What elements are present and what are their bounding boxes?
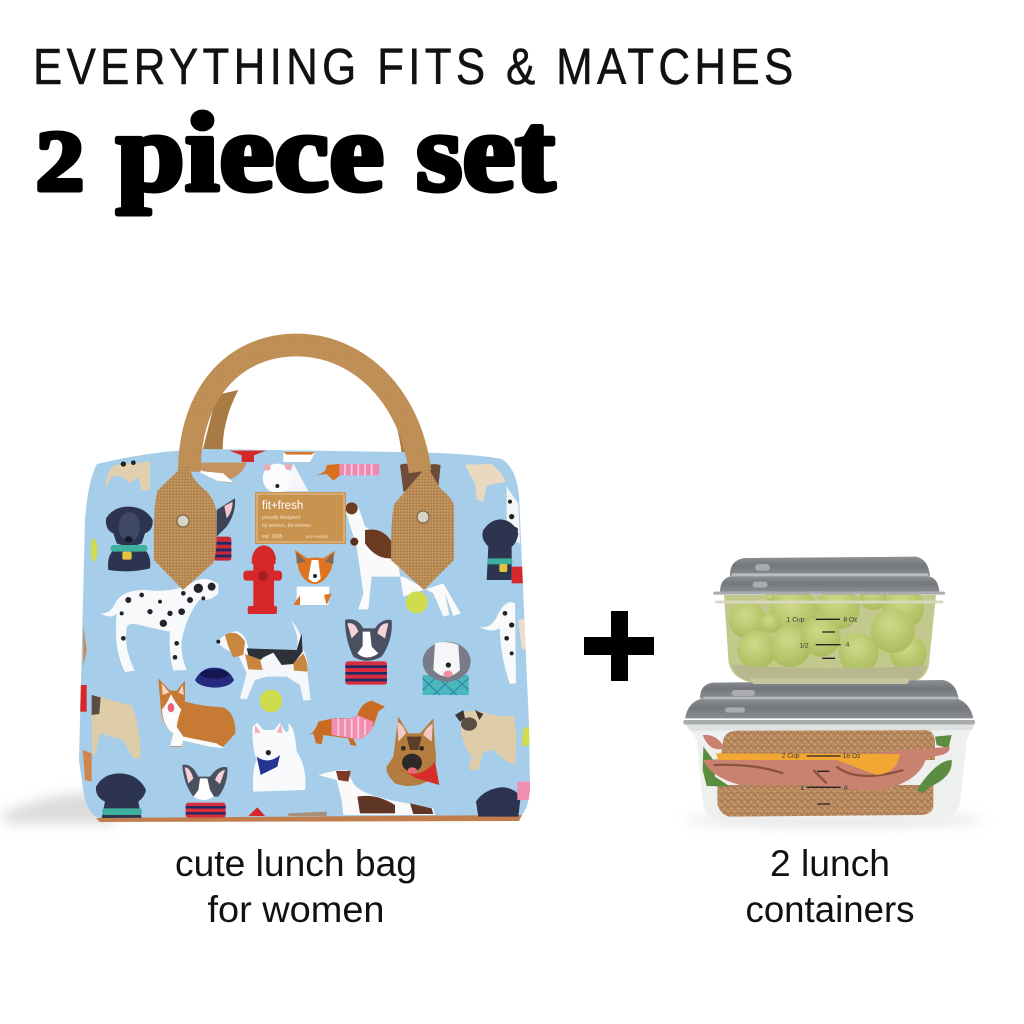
- back handle: [202, 390, 418, 454]
- lunch bag illustration: [0, 345, 532, 824]
- caption: lunch bag: for women: [208, 889, 384, 930]
- print: dalmatian at side: [479, 602, 528, 684]
- caption: lunch bag: [175, 843, 417, 930]
- small container body: [724, 595, 936, 684]
- headline: 2 piece set: 2: [36, 113, 84, 209]
- print: shih tzu: [423, 642, 471, 695]
- left rivet: [177, 515, 189, 527]
- print: corgi: [158, 678, 235, 748]
- small measurement marks: [787, 616, 857, 658]
- plus sign: [584, 611, 654, 681]
- left handle tab: [154, 466, 217, 590]
- caption: containers: 2 lunch: [770, 843, 890, 884]
- print: tennis ball: [406, 591, 428, 613]
- print: french bulldog under tab: [213, 498, 235, 561]
- small lid: [720, 576, 939, 592]
- print: tennis ball 2: [260, 690, 282, 712]
- print: top row dogs: [105, 451, 520, 543]
- print: fire hydrant: [243, 545, 282, 614]
- large measurement marks: 2 Cup: [782, 752, 800, 759]
- large lid: [685, 698, 973, 718]
- brand label: est. 2005: [262, 534, 283, 540]
- cheese: [716, 753, 900, 775]
- print: papillon: [293, 550, 335, 605]
- brand label: proudly designed: [262, 515, 300, 521]
- print: pug left: [80, 685, 140, 758]
- print: beagle: [216, 620, 311, 701]
- headline: everything fits and matches: EVERYTHING FITS & MATCHES: [33, 39, 793, 96]
- large rim: [683, 720, 975, 725]
- sliced ham: [703, 735, 950, 791]
- print: dog bowl: [195, 668, 234, 688]
- caption: lunch bag: cute lunch bag: [175, 843, 417, 884]
- small measurement marks: 1 Cup: [787, 616, 805, 623]
- caption: containers: [746, 843, 914, 930]
- small measurement marks: 1/2: [799, 642, 809, 649]
- print: black labrador right: [482, 519, 523, 584]
- print: side tennis ball: [91, 539, 97, 561]
- large measurement marks: [782, 752, 860, 804]
- large measurement marks: 16 Oz: [843, 753, 860, 760]
- bag body: [79, 449, 530, 818]
- print: greyhound: [248, 770, 435, 816]
- sandwich top bread: [720, 730, 935, 760]
- brand label: fit+fresh: [262, 500, 303, 512]
- dog print pattern: [80, 451, 532, 818]
- small measurement marks: 8 Oz: [843, 616, 857, 623]
- print: black labrador left: [106, 507, 153, 571]
- brand label: pro+tection: [306, 534, 329, 539]
- print: dalmatian: [99, 579, 218, 672]
- print: german shepherd: [386, 717, 439, 786]
- print: dachshund: [306, 701, 385, 746]
- container shadow: [685, 813, 985, 827]
- large measurement marks: 1: [801, 785, 805, 792]
- headline: 2 piece set: piece: [116, 91, 384, 215]
- caption: containers: containers: [746, 889, 914, 930]
- bag ground shadow: [0, 792, 120, 824]
- lettuce: [703, 735, 952, 793]
- large container body: [686, 724, 974, 820]
- large container with sandwich: [683, 678, 975, 820]
- small measurement marks: 4: [846, 642, 850, 649]
- large measurement marks: 8: [844, 785, 848, 792]
- small container underside: [749, 678, 910, 684]
- bag bottom trim: [96, 815, 522, 822]
- print: bottom french bulldog: [182, 765, 227, 818]
- print: left side panel fragments: [83, 627, 92, 782]
- lower half of the print: [80, 579, 531, 818]
- container base tint: [732, 664, 927, 683]
- sandwich bottom bread: [717, 785, 933, 817]
- headline: 2 piece set: set: [416, 91, 555, 215]
- print: bottom black labrador: [96, 773, 146, 818]
- brand label: by women, for women: [262, 523, 311, 529]
- small container with grapes: [713, 557, 945, 684]
- print: french bulldog with sweater: [345, 619, 392, 685]
- right handle tab: [391, 466, 454, 590]
- print: bottom right labrador: [476, 726, 531, 817]
- front handle: [189, 345, 420, 472]
- food containers: [683, 557, 985, 827]
- print: westie: [252, 723, 305, 792]
- headline: 2 piece set: [36, 91, 555, 215]
- right rivet: [417, 511, 429, 523]
- small rim: [713, 592, 945, 595]
- brand label: [255, 492, 346, 544]
- grapes: [729, 583, 927, 673]
- print: spotted pointer dog: [345, 502, 461, 617]
- print: pug right: [455, 710, 516, 770]
